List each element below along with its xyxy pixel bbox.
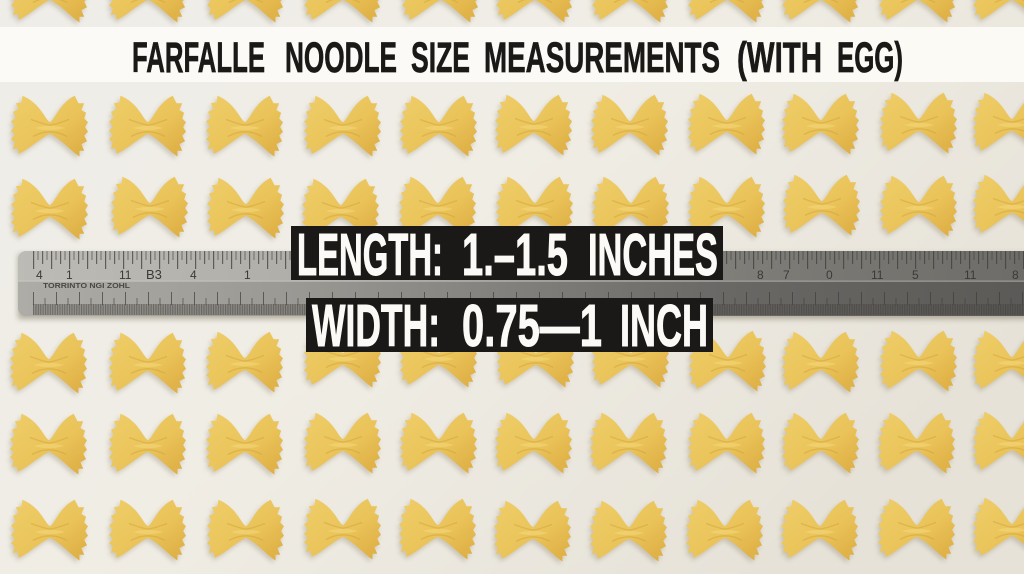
title: EGG) (837, 34, 903, 82)
ruler upper scale numbers: 8 (1012, 268, 1019, 282)
width measurement label: INCH (620, 293, 708, 359)
ruler upper scale numbers (36, 267, 1019, 282)
title banner (0, 27, 1024, 82)
width measurement label: 0.75—1 (462, 293, 602, 359)
title: SIZE (411, 34, 470, 82)
title (132, 34, 903, 82)
width measurement label (306, 293, 713, 359)
ruler upper scale numbers: 7 (783, 268, 790, 282)
pasta row 1 (behind banner) (9, 0, 1024, 25)
ruler upper scale numbers: 4 (190, 268, 197, 282)
ruler upper scale numbers: 11 (964, 268, 977, 282)
steel ruler (18, 251, 1024, 319)
length measurement label: INCHES (588, 222, 718, 288)
ruler upper scale numbers: 8 (757, 268, 764, 282)
length measurement label: 1.–1.5 (462, 222, 568, 288)
ruler upper scale numbers: 1 (66, 268, 73, 282)
ruler engraved label: TORRINTO NGI ZOHL (43, 283, 131, 290)
pasta row 6 (9, 498, 1024, 564)
title: MEASUREMENTS (484, 34, 720, 82)
ruler upper scale numbers: 0 (826, 268, 833, 282)
title: (WITH (737, 34, 822, 82)
width measurement label: WIDTH: (312, 293, 440, 359)
ruler upper scale numbers: B3 (146, 267, 162, 282)
ruler upper scale numbers: 11 (871, 268, 884, 282)
pasta row 5 (8, 412, 1024, 477)
ruler upper scale numbers: 4 (36, 268, 43, 282)
pasta row 3 (9, 175, 1024, 242)
pasta row 4 (8, 327, 1024, 396)
title: NOODLE (285, 34, 397, 82)
title: FARFALLE (132, 34, 265, 82)
length measurement label: LENGTH: (297, 222, 443, 288)
ruler upper scale numbers: 5 (912, 268, 919, 282)
ruler upper scale numbers: 1 (244, 268, 251, 282)
length measurement label (291, 222, 723, 288)
pasta row 2 (9, 93, 1024, 159)
ruler upper scale numbers: 11 (119, 268, 132, 282)
